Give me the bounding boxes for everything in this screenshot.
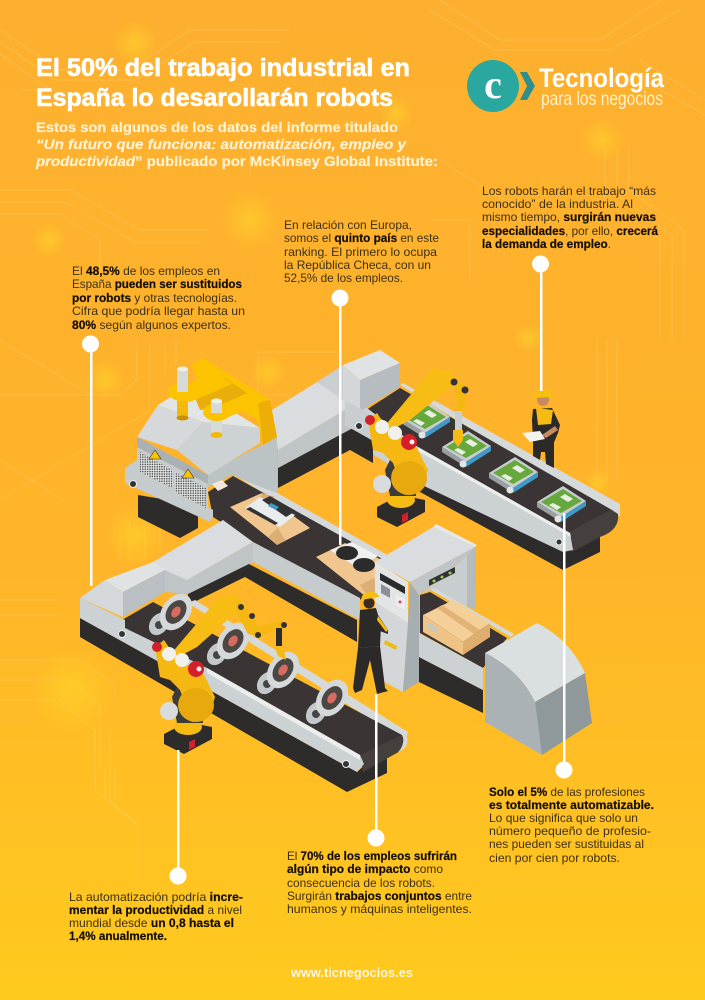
text: productividad: mentar la productividad a nivel: [69, 903, 242, 917]
gauges: [145, 588, 355, 728]
text: 5% automatizable: Solo el 5% de las profesiones: [489, 785, 645, 799]
text: especialidades: conocido” de la industria. Al: [482, 197, 633, 211]
subtitle: productividad ” publicado por McKinsey Global Institute:: [35, 153, 438, 169]
pcb 4: [537, 486, 586, 522]
subtitle: [35, 119, 438, 169]
upper hood: [317, 350, 400, 410]
gauge 4: [302, 674, 355, 728]
connector: 5% automatizable: [556, 513, 572, 778]
small item under machine: [212, 480, 228, 491]
lower hood: [80, 562, 165, 617]
logo text: Tecnología: [539, 63, 665, 93]
left machine: [125, 358, 277, 538]
text: 70% impacto: algún tipo de impacto como: [287, 862, 443, 876]
text: 70% impacto: [287, 849, 472, 916]
text: Europa: 52,5% de los empleos.: [284, 271, 403, 285]
text: 48,5% empleos: España pueden ser sustituidos: [72, 277, 242, 291]
status lights: [429, 567, 455, 586]
connector: nuevas especialidades: [532, 256, 549, 391]
logo text: para los negocios: [541, 89, 663, 110]
worker with clipboard: [522, 389, 560, 468]
text: 5% automatizable: Lo que significa que solo un: [489, 811, 638, 825]
text: 70% impacto: Surgirán trabajos conjuntos entre: [287, 889, 472, 903]
central scanner machine: [375, 524, 514, 713]
yellow gantry: [168, 358, 277, 445]
pcb 2: [442, 431, 491, 468]
subtitle: Estos son algunos de los datos del informe titulado: [36, 119, 398, 135]
upper robot arm: [365, 368, 468, 527]
logo: Tecnología para los negocios: [467, 60, 665, 112]
gauge 2: [203, 617, 256, 669]
title: España lo desarollarán robots: [36, 84, 393, 112]
logo text: [539, 63, 665, 110]
connecting trunk upper: [272, 382, 375, 488]
text: 5% automatizable: número pequeño de profesio-: [489, 824, 651, 838]
text: 48,5% empleos: [72, 264, 245, 332]
text: Europa: ranking. El primero lo ocupa: [284, 245, 437, 259]
text: productividad: 1,4% anualmente.: [69, 929, 167, 943]
text: Europa: la República Checa, con un: [284, 258, 431, 272]
text: productividad: [69, 890, 243, 943]
text: 5% automatizable: es totalmente automatizable.: [489, 798, 654, 812]
connector: 70% empleos: [368, 694, 384, 846]
end hood: [485, 623, 592, 755]
text: 48,5% empleos: El 48,5% de los empleos en: [72, 264, 220, 278]
control panel: [380, 573, 405, 650]
text: Europa: somos el quinto país en este: [284, 231, 439, 245]
text: 70% impacto: El 70% de los empleos sufrirán: [287, 849, 457, 863]
connector: 48,5%: [82, 336, 99, 586]
icon: chevron: [520, 72, 535, 100]
open box with device: [230, 493, 310, 545]
pcb 1: [401, 402, 450, 438]
cardboard box: [423, 600, 490, 655]
open box with speakers: [316, 542, 395, 600]
text: 70% impacto: consecuencia de los robots.: [287, 876, 435, 890]
connector: quinto país: [332, 290, 348, 545]
production line illustration: [80, 350, 620, 792]
icon: teal circle with c: [467, 60, 519, 112]
title: El 50% del trabajo industrial en: [36, 54, 410, 82]
text: 5% automatizable: [489, 785, 654, 865]
text: productividad: mundial desde un 0,8 hasta el: [69, 916, 234, 930]
subtitle: “Un futuro que funciona: automatización, empleo y: [36, 136, 407, 152]
worker at panel: [353, 592, 388, 694]
text: 70% impacto: humanos y máquinas inteligentes.: [287, 902, 472, 916]
text: especialidades: especialidades, por ello, crecerá: [482, 224, 658, 238]
warning signs: [149, 450, 194, 478]
text: especialidades: la demanda de empleo.: [482, 237, 611, 251]
icon: teal circle with c: c: [484, 62, 502, 107]
connector: productividad: [170, 750, 186, 884]
central conveyor belt: [208, 472, 400, 600]
text: especialidades: mismo tiempo, surgirán nuevas: [482, 210, 656, 224]
lower-left conveyor: [80, 562, 408, 792]
gauge 1: [145, 588, 199, 639]
vents: [140, 452, 206, 508]
pcb 3: [489, 457, 538, 494]
text: 5% automatizable: cien por cien por robots.: [489, 851, 620, 865]
connector lines and dots: [82, 256, 572, 884]
pcb boards on belt: [401, 402, 586, 522]
title: [36, 54, 410, 112]
text: 48,5% empleos: Cifra que podría llegar hasta un: [72, 304, 245, 318]
text: Europa: [284, 218, 439, 285]
glow spots: [30, 21, 624, 732]
lower robot arm: [152, 594, 287, 754]
text: 48,5% empleos: 80% según algunos expertos.: [72, 318, 231, 332]
text: 48,5% empleos: por robots y otras tecnologías.: [72, 291, 237, 305]
text: Europa: En relación con Europa,: [284, 218, 412, 232]
text: 5% automatizable: nes pueden ser sustituidas al: [489, 837, 644, 851]
text: productividad: La automatización podría incre-: [69, 890, 243, 904]
text: especialidades: [482, 184, 658, 251]
lower trunk: [153, 520, 360, 642]
upper-right conveyor: [350, 383, 620, 570]
text: especialidades: Los robots harán el trabajo “más: [482, 184, 656, 198]
footer url: www.ticnegocios.es: [290, 966, 413, 980]
gauge 3: [253, 646, 306, 698]
